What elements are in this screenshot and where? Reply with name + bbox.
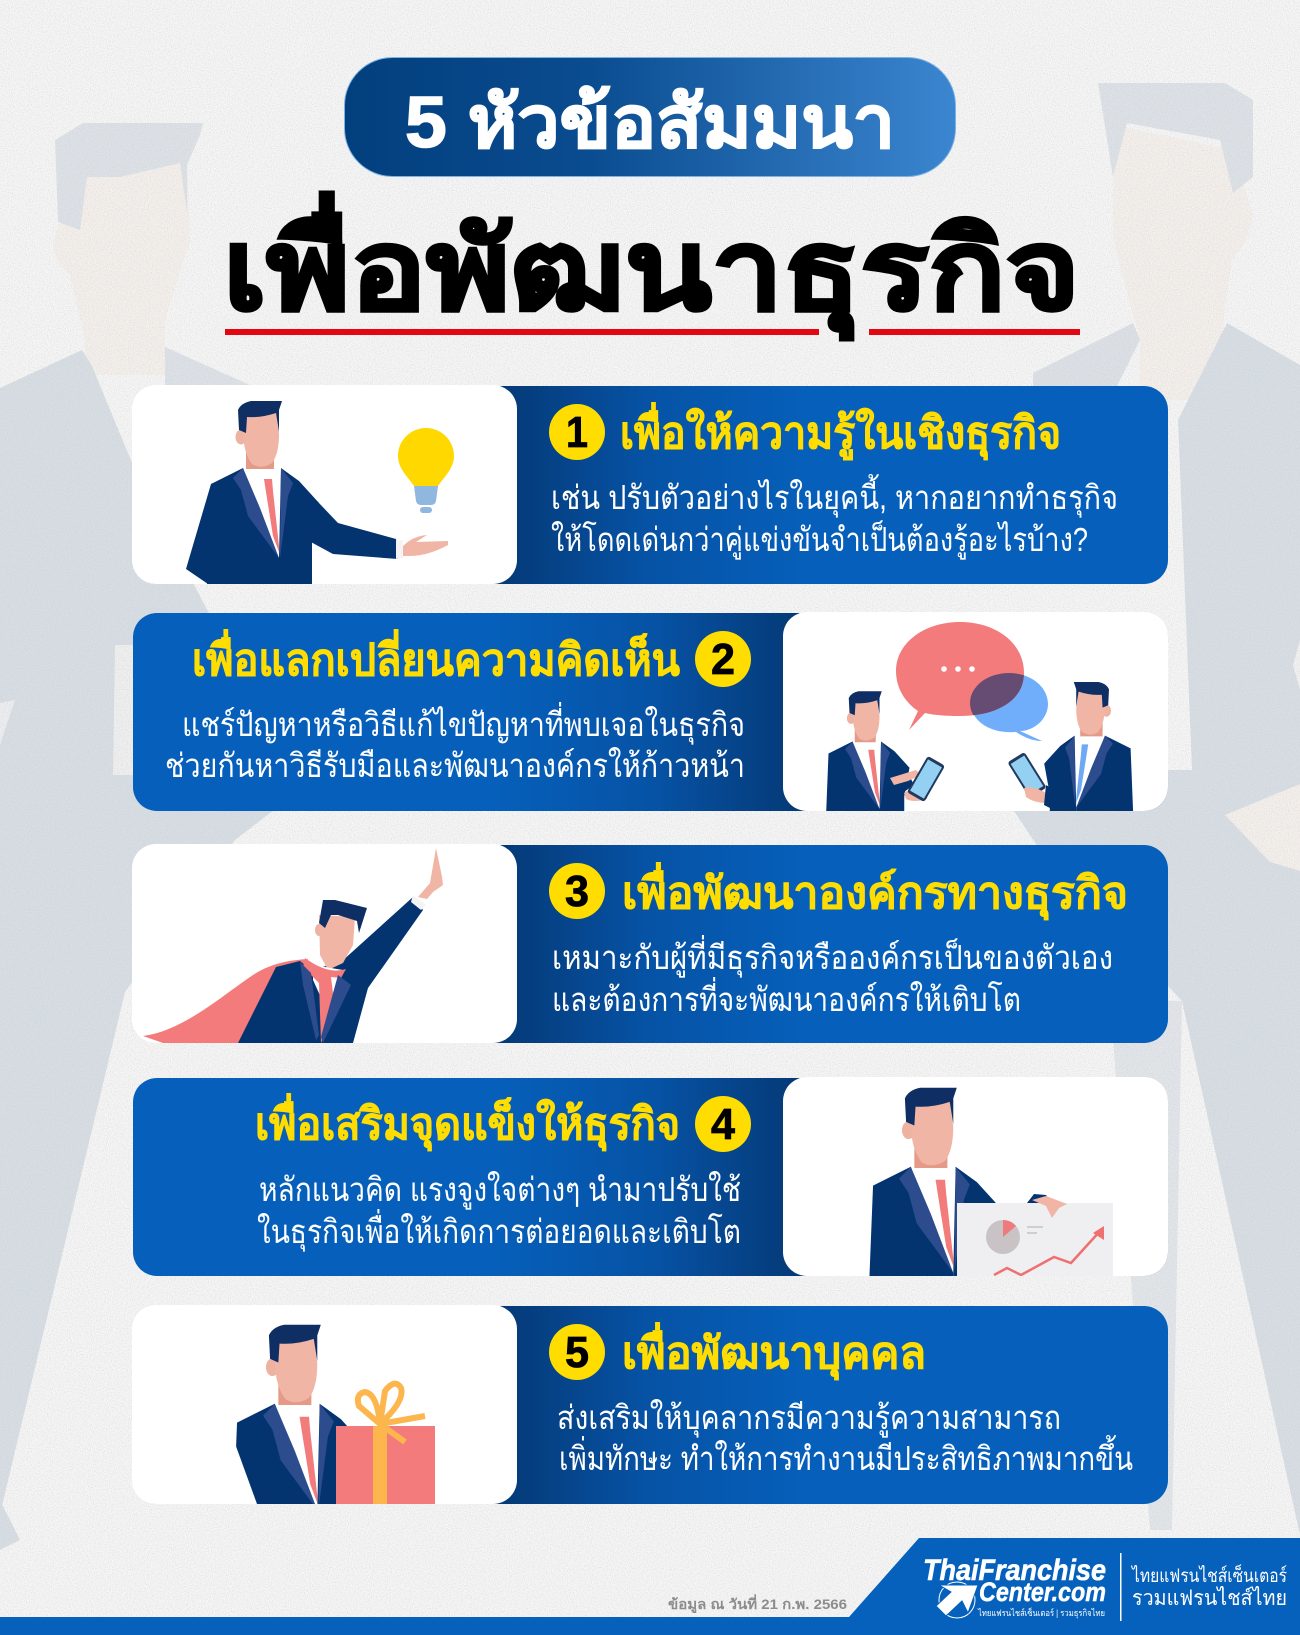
panel 5 body: ส่งเสริมให้บุคลากรมีความรู้ความสามารถ xyxy=(557,1399,1061,1438)
panel 2 body: ช่วยกันหาวิธีรับมือและพัฒนาองค์กรให้ก้าวหน้า xyxy=(165,747,745,784)
footer shape xyxy=(0,1538,1300,1635)
panel 2 background xyxy=(133,613,1168,811)
illustration 3: superhero businessman with cape xyxy=(132,844,517,1043)
data date note: ข้อมูล ณ วันที่ 21 ก.พ. 2566 xyxy=(668,1594,847,1613)
panel 1 body: เช่น ปรับตัวอย่างไรในยุคนี้, หากอยากทำธรุกิจ xyxy=(551,474,1118,518)
panel 4 heading: เพื่อเสริมจุดแข็งให้ธุรกิจ xyxy=(255,1093,680,1152)
footer band with logo xyxy=(0,1538,1300,1635)
panel 1 heading: เพื่อให้ความรู้ในเชิงธุรกิจ xyxy=(620,402,1061,461)
logo tagline: ไทยแฟรนไชส์เซ็นเตอร์ | รวมธุรกิจไทย xyxy=(977,1606,1105,1619)
number 3 badge: 3 xyxy=(565,867,589,916)
footer slogan: รวมแฟรนไชส์ไทย xyxy=(1132,1586,1287,1610)
illustration 5: man holding a gift box xyxy=(132,1305,517,1504)
phone right xyxy=(1008,753,1046,791)
panel 5 body xyxy=(557,1399,1133,1477)
number 2 badge xyxy=(695,631,751,687)
logo: ThaiFranchise Center.com: Center.com xyxy=(979,1577,1106,1607)
panel 4 body: หลักแนวคิด แรงจูงใจต่างๆ นำมาปรับใช้ xyxy=(259,1171,741,1210)
lightbulb xyxy=(398,428,454,513)
logo: ThaiFranchise Center.com xyxy=(923,1554,1106,1619)
panel 2 xyxy=(133,612,1168,811)
panel 5 body: เพิ่มทักษะ ทำให้การทำงานมีประสิทธิภาพมากขึ้น xyxy=(559,1435,1133,1477)
blue speech bubble xyxy=(971,673,1048,741)
panel 4 xyxy=(133,1077,1168,1276)
main title text: เพื่อพัฒนาธุรกิจ xyxy=(223,191,1080,341)
panel 2 body: แชร์ปัญหาหรือวิธีแก้ไขปัญหาที่พบเจอในธุรกิจ xyxy=(182,702,745,745)
illustration 4: man presenting a growth chart xyxy=(783,1077,1168,1276)
panel 3 body: เหมาะกับผู้ที่มีธุรกิจหรือองค์กรเป็นของตัวเอง xyxy=(552,935,1113,978)
logo arrow xyxy=(936,1582,978,1618)
footer slogan xyxy=(1130,1563,1287,1610)
illustration 1: man with idea lightbulb xyxy=(132,385,517,584)
panel 3 background xyxy=(133,845,1168,1043)
panel 5 heading: เพื่อพัฒนาบุคคล xyxy=(622,1322,926,1381)
panel 2 body xyxy=(165,702,745,784)
panel 5 background xyxy=(133,1306,1168,1504)
panel 3 heading: เพื่อพัฒนาองค์กรทางธุรกิจ xyxy=(622,862,1128,921)
bubble overlap xyxy=(970,673,1024,716)
pill heading text: 5 หัวข้อสัมมนา xyxy=(405,83,895,163)
panel 4 background xyxy=(133,1078,1168,1276)
number 1 badge xyxy=(549,404,605,460)
panel 1 body: ให้โดดเด่นกว่าคู่แข่งขันจำเป็นต้องรู้อะไรบ้าง? xyxy=(551,520,1088,560)
number 5 badge: 5 xyxy=(565,1328,589,1377)
panel 4 body: ในธุรกิจเพื่อให้เกิดการต่อยอดและเติบโต xyxy=(257,1209,741,1252)
number 3 badge xyxy=(549,863,605,919)
speech dots xyxy=(941,666,975,672)
background figure right xyxy=(1000,83,1300,1535)
red underline xyxy=(225,329,1080,335)
main title with red underline xyxy=(223,191,1080,341)
number 4 badge xyxy=(695,1096,751,1152)
panel 5 xyxy=(132,1305,1168,1504)
number 5 badge xyxy=(549,1324,605,1380)
presentation board xyxy=(957,1196,1113,1283)
number 4 badge: 4 xyxy=(711,1100,736,1149)
illustration 2: two men with phones and speech bubbles xyxy=(783,612,1168,811)
panel 3 body: และต้องการที่จะพัฒนาองค์กรให้เติบโต xyxy=(552,977,1021,1018)
panel 1 background xyxy=(133,386,1168,584)
logo divider xyxy=(1120,1553,1122,1621)
phone left xyxy=(907,756,945,802)
panel 3 xyxy=(132,844,1168,1043)
gift box xyxy=(336,1384,435,1506)
panel 4 body xyxy=(257,1171,741,1252)
heading pill xyxy=(344,58,956,176)
logo wordmark: ThaiFranchise xyxy=(923,1554,1106,1587)
red speech bubble xyxy=(896,622,1024,730)
background figure left xyxy=(0,123,300,1550)
number 1 badge: 1 xyxy=(566,408,588,457)
panel 1 xyxy=(132,385,1168,584)
panel 1 body xyxy=(551,474,1118,560)
number 2 badge: 2 xyxy=(711,635,735,684)
panel 2 heading: เพื่อแลกเปลี่ยนความคิดเห็น xyxy=(192,629,680,685)
panel 3 body xyxy=(552,935,1113,1018)
